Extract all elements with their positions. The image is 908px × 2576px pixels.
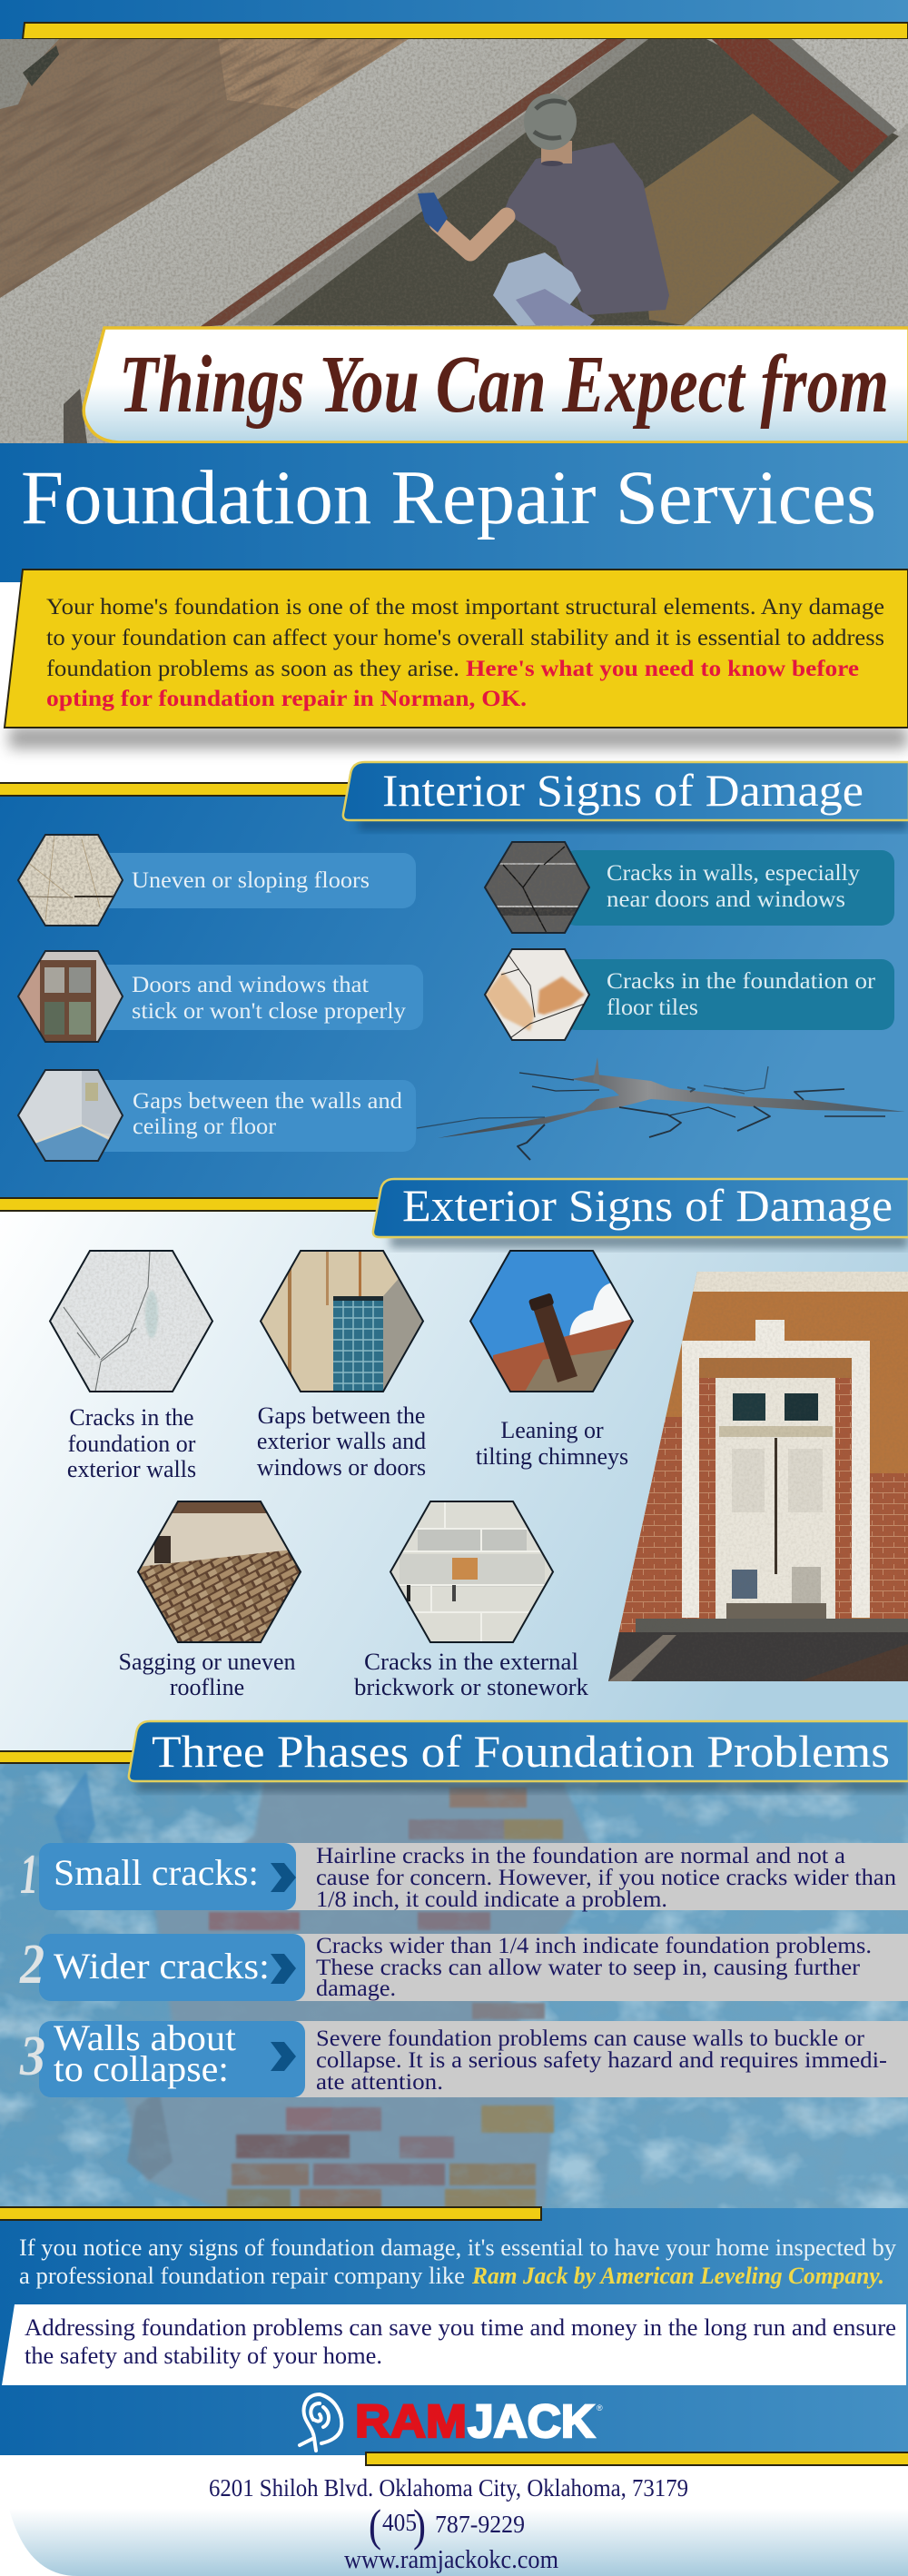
interior heading xyxy=(343,762,908,830)
phase 1: 1 xyxy=(20,1844,38,1906)
sign: uneven floors xyxy=(18,835,416,926)
exterior heading xyxy=(373,1179,908,1248)
phone number: ( xyxy=(369,2500,381,2551)
sign: gaps walls ceiling xyxy=(18,1070,416,1161)
phone number: 405 xyxy=(382,2509,417,2536)
exterior sign: sagging roofline: Sagging or uneven xyxy=(119,1649,295,1675)
phase 2: These cracks can allow water to seep in, causing further xyxy=(316,1956,861,1980)
phone number: ) xyxy=(413,2500,426,2551)
exterior sign: gaps around windows: Gaps between the xyxy=(258,1402,425,1429)
phone number xyxy=(369,2500,525,2551)
closing yellow rule xyxy=(0,2207,541,2220)
phase 3 xyxy=(19,2017,908,2097)
sign: cracks in walls: near doors and windows xyxy=(607,886,845,912)
hero photo: worker levelling foundation xyxy=(0,39,908,443)
title band: foundation repair services xyxy=(0,443,908,582)
door photo xyxy=(599,1272,908,1689)
exterior sign: brickwork cracks: brickwork or stonework xyxy=(354,1674,588,1700)
footer address xyxy=(209,2474,688,2574)
interior yellow rule xyxy=(0,783,352,796)
exterior sign: sagging roofline xyxy=(119,1501,301,1700)
exterior sign: sagging roofline: roofline xyxy=(170,1674,244,1700)
phases yellow rule xyxy=(0,1751,134,1763)
exterior sign: gaps around windows: exterior walls and xyxy=(257,1428,426,1454)
icon: crack illustration xyxy=(417,1057,905,1160)
phase 1: cause for concern. However, if you notice cracks wider than xyxy=(316,1866,897,1890)
phase 2: 2 xyxy=(19,1934,44,1996)
phone number: 787-9229 xyxy=(435,2511,525,2538)
phase 2: Cracks wider than 1/4 inch indicate foundation problems. xyxy=(316,1934,872,1958)
exterior yellow rule xyxy=(0,1198,380,1211)
Ram Jack logo xyxy=(300,2394,603,2451)
exterior sign: cracks in foundation xyxy=(50,1251,212,1482)
sign: doors and windows: stick or won't close properly xyxy=(132,997,406,1024)
white callout xyxy=(2,2304,906,2385)
white callout: the safety and stability of your home. xyxy=(25,2342,382,2369)
phase 1: Hairline cracks in the foundation are normal and not a xyxy=(316,1844,845,1868)
closing text: a professional foundation repair company like xyxy=(19,2262,465,2289)
exterior sign: cracks in foundation: Cracks in the xyxy=(69,1404,194,1431)
phase 2 xyxy=(19,1934,908,2001)
footer address: www.ramjackokc.com xyxy=(344,2546,558,2574)
interior heading: Interior Signs of Damage xyxy=(382,765,864,816)
sign: cracks in walls: Cracks in walls, especially xyxy=(607,859,860,886)
exterior sign: cracks in foundation: foundation or xyxy=(68,1431,196,1457)
intro text: to your foundation can affect your home's overall stability and it is essential to address xyxy=(46,624,884,650)
footer address: 6201 Shiloh Blvd. Oklahoma City, Oklahoma, 73179 xyxy=(209,2474,688,2502)
sign: foundation or floor tile cracks: floor tiles xyxy=(607,994,698,1020)
phase 3: 3 xyxy=(19,2026,45,2087)
exterior sign: gaps around windows xyxy=(257,1251,426,1481)
intro text: Your home's foundation is one of the most important structural elements. Any damage xyxy=(46,593,884,619)
phase 3: collapse. It is a serious safety hazard and requires immedi- xyxy=(316,2048,887,2073)
closing text: Ram Jack by American Leveling Company. xyxy=(471,2262,884,2289)
white callout: Addressing foundation problems can save you time and money in the long run and ensure xyxy=(25,2313,896,2341)
phases heading xyxy=(129,1721,908,1791)
icon: ram head xyxy=(300,2394,341,2451)
exterior sign: cracks in foundation: exterior walls xyxy=(67,1456,196,1482)
sign: cracks in walls xyxy=(485,842,894,933)
Ram Jack logo: JACK xyxy=(468,2395,595,2447)
title band: foundation repair services: Foundation Repair Services xyxy=(21,455,876,540)
interior section background xyxy=(0,783,908,1201)
worker xyxy=(418,94,669,325)
sign: foundation or floor tile cracks xyxy=(485,949,894,1040)
sign: doors and windows: Doors and windows that xyxy=(132,971,369,997)
closing text xyxy=(19,2234,897,2289)
intro text: Here's what you need to know before xyxy=(466,655,859,681)
top yellow bar xyxy=(23,23,908,39)
sign: doors and windows xyxy=(18,951,423,1042)
exterior sign: brickwork cracks: Cracks in the external xyxy=(364,1649,578,1675)
sign: uneven floors: Uneven or sloping floors xyxy=(132,867,370,893)
exterior sign: brickwork cracks xyxy=(354,1501,588,1700)
exterior heading: Exterior Signs of Damage xyxy=(402,1180,893,1231)
footer gradient panel xyxy=(9,2509,908,2576)
exterior section background xyxy=(0,1211,908,1765)
Ram Jack logo: RAM xyxy=(355,2395,467,2447)
phase 1 xyxy=(20,1843,908,1912)
sign: foundation or floor tile cracks: Cracks in the foundation or xyxy=(607,967,876,994)
phase 3: Severe foundation problems can cause walls to buckle or xyxy=(316,2026,865,2051)
phase 1: Small cracks: xyxy=(54,1852,259,1893)
phase 2: damage. xyxy=(316,1977,396,2001)
exterior sign: gaps around windows: windows or doors xyxy=(257,1454,426,1481)
phases heading: Three Phases of Foundation Problems xyxy=(152,1726,890,1777)
phase 3: Walls about xyxy=(54,2017,236,2058)
exterior sign: leaning chimneys: Leaning or xyxy=(500,1417,604,1443)
footer yellow rule xyxy=(366,2452,908,2465)
intro text xyxy=(46,593,884,711)
Ram Jack logo: ® xyxy=(597,2403,603,2413)
phase 3: ate attention. xyxy=(316,2070,443,2095)
phase 3: to collapse: xyxy=(54,2048,229,2089)
intro panel xyxy=(5,570,908,748)
intro text: opting for foundation repair in Norman, OK. xyxy=(46,685,527,711)
intro text: foundation problems as soon as they arise. xyxy=(46,655,459,681)
closing text: If you notice any signs of foundation damage, it's essential to have your home inspected by xyxy=(19,2234,897,2261)
phase 1: 1/8 inch, it could indicate a problem. xyxy=(316,1887,667,1912)
sign: gaps walls ceiling: Gaps between the walls and xyxy=(133,1087,402,1114)
phases wall background xyxy=(0,1763,908,2208)
phase 2: Wider cracks: xyxy=(54,1946,270,1986)
closing blue section xyxy=(0,2208,908,2455)
title ribbon xyxy=(84,328,908,442)
exterior sign: leaning chimneys xyxy=(470,1251,633,1470)
sign: gaps walls ceiling: ceiling or floor xyxy=(133,1113,277,1139)
top blue band xyxy=(0,0,908,40)
exterior sign: leaning chimneys: tilting chimneys xyxy=(476,1443,628,1470)
